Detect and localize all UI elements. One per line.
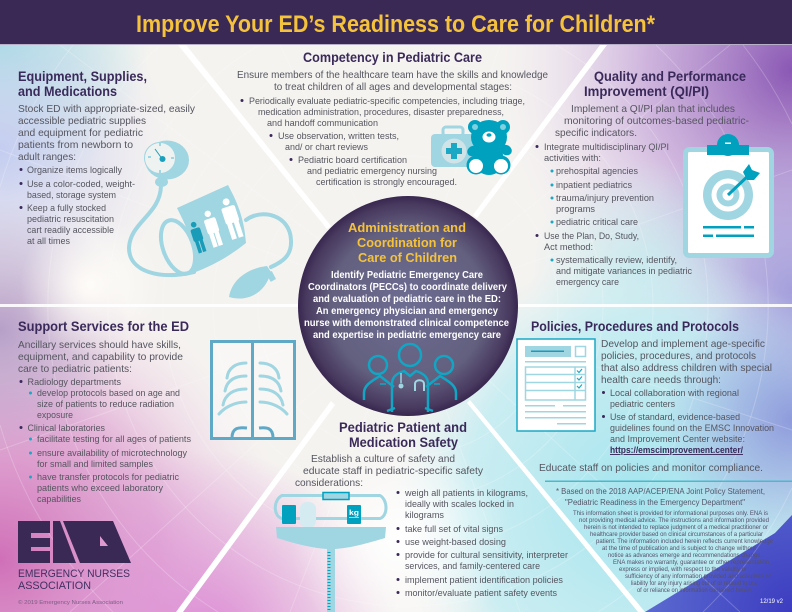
text: equipment intro: adult ranges:: [18, 151, 76, 163]
list: quality bullets: programs: [556, 204, 595, 215]
heading: safety: Pediatric Patient and: [339, 420, 467, 435]
text: support intro: Ancillary services should have skills,: [18, 339, 181, 351]
list: policies bullets: guidelines found on the EMSC Innovation: [610, 423, 774, 434]
footnote: disclaimer: sufficiency of any information provided and assumes no: [625, 574, 773, 580]
icon: weighing scale: kg: [349, 508, 359, 517]
logo: Emergency Nurses Association: EMERGENCY NURSES: [18, 568, 130, 580]
list: support bullets: patients who exceed laboratory: [37, 483, 163, 494]
text: administration body: and expertise in pediatric emergency care: [313, 329, 501, 341]
list: quality bullets: and mitigate variances in pediatric: [556, 266, 692, 277]
list: policies bullets: and Improvement Center website:: [610, 434, 745, 445]
text: equipment intro: [18, 103, 196, 163]
list: safety bullets: monitor/evaluate patient safety events: [405, 588, 557, 599]
text: competency intro: Ensure members of the healthcare team have the skills and knowledge: [237, 69, 548, 81]
list: safety bullets: provide for cultural sensitivity, interpreter: [405, 550, 568, 561]
list: competency bullets: Pediatric board certification: [298, 155, 407, 166]
list: policies bullets: pediatric centers: [610, 399, 675, 410]
text: competency intro: [237, 69, 548, 93]
footnote: source statement: "Pediatric Readiness in the Emergency Department": [565, 497, 745, 507]
heading: quality: Improvement (QI/PI): [584, 84, 709, 99]
list: policies bullets: Local collaboration with regional: [610, 388, 739, 399]
version label: 12/19 v2: [760, 598, 783, 605]
list: safety bullets: take full set of vital signs: [405, 524, 503, 535]
list: support bullets: facilitate testing for all ages of patients: [37, 434, 191, 445]
text: educate staff: Educate staff on policies and monitor compliance.: [539, 462, 763, 474]
list: equipment bullets: at all times: [27, 236, 70, 247]
heading: safety: [339, 420, 467, 450]
footnote: disclaimer: not providing medical advice. The instructions and information provided: [579, 518, 769, 524]
text: support intro: equipment, and capability to provide: [18, 351, 183, 363]
panel: pediatric patient and medication safety: [275, 420, 568, 612]
footnote: source statement: [556, 486, 765, 507]
list: support bullets: develop protocols based on age and: [37, 388, 180, 399]
list: support bullets: exposure: [37, 410, 73, 421]
logo: Emergency Nurses Association: ASSOCIATION: [18, 580, 91, 592]
list: policies bullets: [602, 388, 774, 456]
heading: equipment: Equipment, Supplies,: [18, 69, 147, 84]
list: equipment bullets: Organize items logically: [27, 165, 122, 176]
heading: quality: [584, 69, 746, 99]
footnote: disclaimer: of or reliance on information contained herein.: [637, 588, 753, 594]
text: equipment intro: Stock ED with appropriate-sized, easily: [18, 103, 196, 115]
list: support bullets: size of patients to reduce radiation: [37, 399, 174, 410]
list: support bullets: Clinical laboratories: [28, 423, 105, 434]
list: equipment bullets: pediatric resuscitation: [27, 214, 114, 225]
text: policies intro: that also address children with special: [601, 362, 772, 374]
list: safety bullets: services, and family-centered care: [405, 561, 540, 572]
text: safety intro: [295, 453, 484, 489]
list: quality bullets: inpatient pediatrics: [556, 180, 632, 191]
icon: chest x-ray: [212, 341, 294, 439]
panel: administration and coordination circle: [298, 196, 518, 416]
text: policies intro: Develop and implement age-specific: [601, 338, 765, 350]
list: quality bullets: pediatric critical care: [556, 217, 638, 228]
footnote: disclaimer: ENA makes no warranty, guarantee or other representation,: [613, 560, 771, 566]
list: quality bullets: Integrate multidisciplinary QI/PI: [544, 142, 669, 153]
text: equipment intro: and equipment for pediatric: [18, 127, 143, 139]
list: quality bullets: trauma/injury prevention: [556, 193, 654, 204]
list: support bullets: have transfer protocols for pediatric: [37, 472, 179, 483]
text: safety intro: Establish a culture of safety and: [311, 453, 455, 465]
list: quality bullets: activities with:: [544, 153, 601, 164]
text: support intro: [18, 339, 183, 375]
heading: quality: Quality and Performance: [594, 69, 746, 84]
list: competency bullets: Periodically evaluate pediatric-specific competencies, including triage,: [249, 96, 525, 107]
copyright: © 2019 Emergency Nurses Association: [18, 599, 123, 606]
list: competency bullets: and handoff communication: [267, 118, 378, 129]
icon: care team: [364, 344, 456, 412]
list: support bullets: for small and limited samples: [37, 459, 153, 470]
heading: administration: Administration and: [348, 220, 466, 235]
list: quality bullets: Use the Plan, Do, Study,: [544, 231, 639, 242]
text: policies intro: [601, 338, 772, 386]
footnote: disclaimer: healthcare provider based on clinical circumstances of a particular: [590, 532, 763, 538]
heading: administration: Care of Children: [358, 250, 457, 265]
list: quality bullets: prehospital agencies: [556, 166, 638, 177]
text: administration body: and evaluation of pediatric care in the ED:: [313, 293, 501, 305]
text: policies intro: policies, procedures, and protocols: [601, 350, 756, 362]
text: equipment intro: accessible pediatric supplies: [18, 115, 146, 127]
footnote: disclaimer: at the time of publication and is subject to change without: [602, 546, 756, 552]
heading: administration: [348, 220, 466, 265]
text: quality intro: specific indicators.: [555, 127, 637, 139]
heading: support services: Support Services for the ED: [18, 319, 189, 334]
heading: equipment: and Medications: [18, 84, 117, 99]
logo: Emergency Nurses Association: [18, 521, 131, 592]
panel: equipment, supplies and medications: [18, 69, 291, 299]
list: equipment bullets: Keep a fully stocked: [27, 203, 106, 214]
list: competency bullets: and/ or chart reviews: [285, 142, 368, 153]
panel: competency in pediatric care: [237, 50, 548, 188]
list: support bullets: [20, 377, 191, 505]
text: administration body: Identify Pediatric Emergency Care: [331, 269, 483, 281]
text: administration body: [304, 269, 509, 341]
footnote: disclaimer: notice as advances emerge and recommendations change.: [608, 553, 762, 559]
footnote: disclaimer: liability for any injury arising out of or related to use: [631, 581, 759, 587]
footnote: disclaimer: express or implied, with respect to the validity or: [619, 567, 747, 573]
icon: clipboard with target: [686, 134, 772, 256]
list: quality bullets: systematically review, identify,: [556, 255, 677, 266]
list: support bullets: capabilities: [37, 494, 81, 505]
title: Improve Your ED’s Readiness to Care for Children*: [136, 11, 656, 38]
heading: competency: Competency in Pediatric Care: [303, 50, 482, 65]
footnote: disclaimer: This information sheet is provided for informational purposes only. ENA is: [573, 511, 768, 517]
panel: quality and performance improvement: [536, 69, 772, 288]
list: equipment bullets: Use a color-coded, weight-: [27, 179, 135, 190]
text: quality intro: [555, 103, 749, 139]
text: safety intro: considerations:: [295, 477, 363, 489]
footnote: disclaimer: [573, 511, 774, 594]
list: safety bullets: kilograms: [405, 510, 444, 521]
heading: policies: Policies, Procedures and Protocols: [531, 319, 739, 334]
text: competency intro: to treat children of all ages and developmental stages:: [274, 81, 512, 93]
list: competency bullets: Use observation, written tests,: [278, 131, 399, 142]
list: equipment bullets: [20, 165, 135, 247]
text: quality intro: Implement a QI/PI plan that includes: [571, 103, 735, 115]
heading: administration: Coordination for: [357, 235, 457, 250]
footnote: disclaimer: patient. The information included herein reflects current knowledge: [596, 539, 774, 545]
list: safety bullets: ideally with scales locked in: [405, 499, 514, 510]
list: competency bullets: [240, 96, 525, 188]
icon: policy document: [517, 339, 595, 431]
list: competency bullets: and pediatric emergency nursing: [307, 166, 437, 177]
footnote: disclaimer: herein is not intended to replace judgment of a medical practitioner or: [584, 525, 768, 531]
list: competency bullets: certification is strongly encouraged.: [316, 177, 457, 188]
icon: family figures: [188, 196, 245, 254]
list: safety bullets: [396, 488, 568, 599]
list: safety bullets: use weight-based dosing: [405, 537, 506, 548]
icon: weighing scale: [275, 492, 386, 612]
text: administration body: nurse with demonstrated clinical competence: [304, 317, 509, 329]
list: policies bullets: Use of standard, evidence-based: [610, 412, 740, 423]
text: administration body: An emergency physician and emergency: [316, 305, 498, 317]
list: quality bullets: [536, 142, 692, 288]
list: quality bullets: emergency care: [556, 277, 619, 288]
text: administration body: Coordinators (PECCs) to coordinate delivery: [308, 281, 507, 293]
list: quality bullets: Act method:: [544, 242, 593, 253]
text: equipment intro: patients from newborn to: [18, 139, 133, 151]
panel: support services for the ED: [18, 319, 294, 505]
header bar: [0, 0, 792, 45]
footnote: source statement: * Based on the 2018 AAP/ACEP/ENA Joint Policy Statement,: [556, 486, 765, 496]
list: safety bullets: weigh all patients in kilograms,: [404, 488, 528, 499]
list: equipment bullets: based, storage system: [27, 190, 116, 201]
icon: first aid kit and teddy bear: [431, 120, 514, 175]
list: policies bullets: https://emscimprovement.center/: [610, 445, 743, 456]
list: support bullets: ensure availability of microtechnology: [37, 448, 187, 459]
text: quality intro: monitoring of outcomes-based pediatric-: [564, 115, 749, 127]
panel: policies, procedures and protocols: [517, 319, 774, 474]
list: safety bullets: implement patient identification policies: [405, 575, 563, 586]
text: support intro: care to pediatric patients:: [18, 363, 132, 375]
text: policies intro: health care needs through:: [601, 374, 721, 386]
heading: equipment: [18, 69, 147, 99]
text: safety intro: educate staff in pediatric-specific safety: [303, 465, 484, 477]
icon: blood pressure cuff: [129, 140, 291, 299]
heading: safety: Medication Safety: [349, 435, 458, 450]
list: equipment bullets: cart readily accessible: [27, 225, 114, 236]
footnote block: [545, 480, 792, 605]
list: competency bullets: medication administration, procedures, disaster preparedness,: [258, 107, 504, 118]
list: support bullets: Radiology departments: [28, 377, 121, 388]
